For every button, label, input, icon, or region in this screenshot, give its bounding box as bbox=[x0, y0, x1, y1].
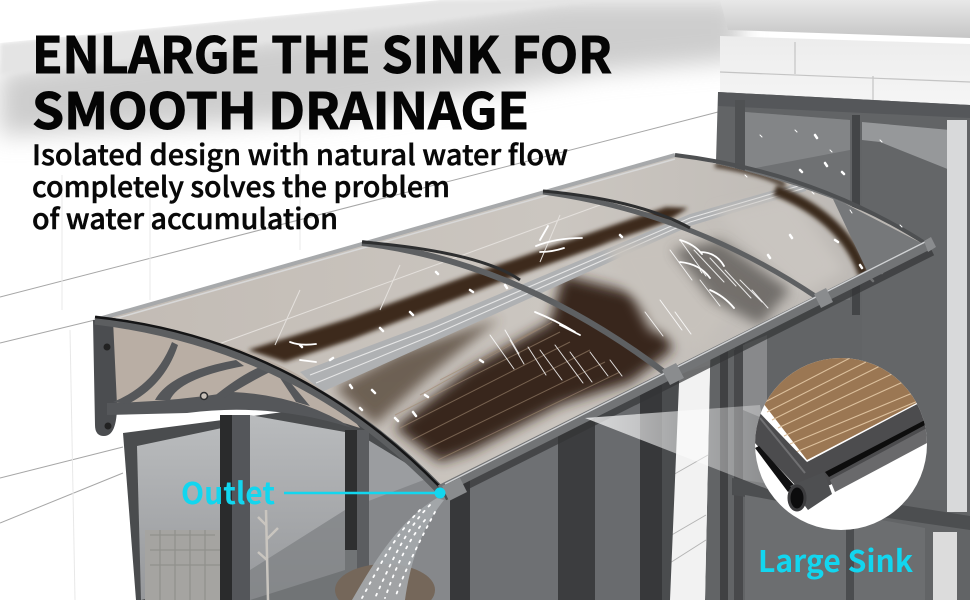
side bracket bbox=[93, 320, 360, 436]
wall lines through panel bbox=[220, 205, 600, 346]
subtitle text block bbox=[32, 134, 568, 238]
callout: outlet: Outlet bbox=[181, 469, 275, 513]
callout: outlet bbox=[181, 469, 446, 513]
curved ribs bbox=[95, 155, 928, 490]
water stream from outlet bbox=[352, 498, 444, 600]
back edge rail bbox=[95, 155, 675, 320]
rib stripes bbox=[395, 322, 620, 460]
title: SMOOTH DRAINAGE bbox=[32, 72, 529, 144]
wood sink floor bbox=[764, 358, 916, 460]
subtitle text block: Isolated design with natural water flow bbox=[32, 134, 568, 174]
dark ribbed arc right bbox=[775, 190, 864, 275]
callout: large sink: Large Sink bbox=[758, 537, 913, 581]
lower brown ribbed area bbox=[395, 275, 672, 462]
detail inset: large sink close-up bbox=[752, 350, 930, 530]
white wall strip between windows bbox=[660, 365, 710, 600]
brown reflection band bbox=[248, 207, 688, 362]
silver rail reflection bbox=[300, 181, 806, 392]
grey shaded sweep bbox=[672, 240, 790, 325]
title: ENLARGE THE SINK FOR bbox=[32, 16, 612, 88]
title bbox=[32, 16, 612, 144]
light beige patch bbox=[605, 237, 678, 344]
awning: translucent curved panel bbox=[95, 155, 928, 490]
grey corner right bbox=[833, 199, 921, 270]
dark sink rim bbox=[755, 404, 926, 486]
spotlight cone to inset bbox=[585, 405, 775, 492]
left window bbox=[123, 360, 680, 600]
water splashes on panel bbox=[290, 130, 902, 421]
front gutter with connectors bbox=[440, 237, 936, 501]
subtitle text block: of water accumulation bbox=[32, 198, 338, 238]
right window bbox=[705, 92, 970, 600]
subtitle text block: completely solves the problem bbox=[32, 166, 450, 206]
